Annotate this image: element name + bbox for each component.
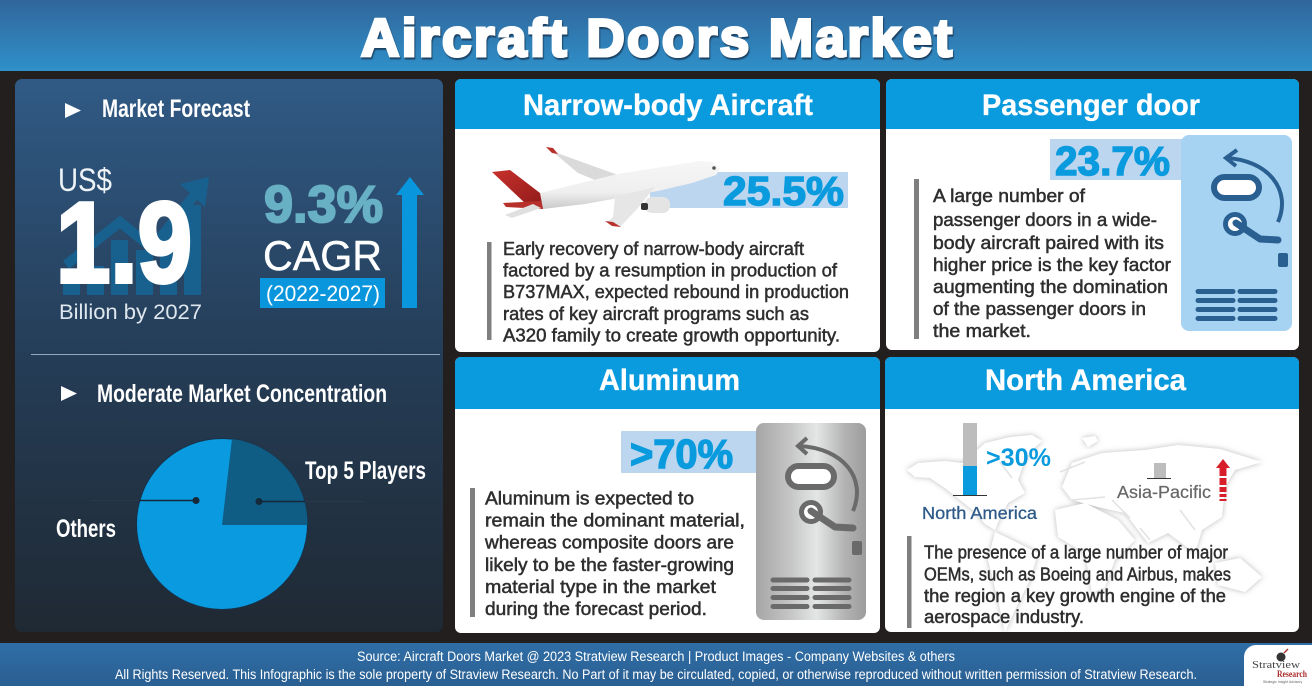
north america bar xyxy=(953,423,987,496)
text block: rates of key aircraft programs such as xyxy=(503,304,809,324)
percentage band xyxy=(621,431,759,473)
text block: passenger doors in a wide- xyxy=(933,210,1157,230)
label: asia-pacific: Asia-Pacific xyxy=(1117,482,1211,502)
logo: Strategic Insight Advisory xyxy=(1263,680,1303,684)
label: top 5 players: Top 5 Players xyxy=(305,457,426,485)
panel: north america xyxy=(885,357,1299,632)
title: Aircraft Doors Market xyxy=(361,9,952,68)
percentage: >30% xyxy=(986,444,1051,472)
icon: passenger door xyxy=(1181,135,1292,331)
text block: the region a key growth engine of the xyxy=(924,586,1226,606)
text block xyxy=(914,179,1171,341)
market value: US$ xyxy=(58,162,112,198)
header banner with title xyxy=(0,0,1312,71)
concentration heading: Moderate Market Concentration xyxy=(97,380,387,408)
text block: factored by a resumption in production of xyxy=(503,260,838,280)
text block: body aircraft paired with its xyxy=(933,233,1164,253)
text block: Aluminum is expected to xyxy=(485,488,694,508)
CAGR value: CAGR xyxy=(263,232,382,279)
text block: augmenting the domination xyxy=(933,277,1168,297)
text block: Early recovery of narrow-body aircraft xyxy=(503,239,804,259)
market forecast heading: Market Forecast xyxy=(102,95,251,123)
text block: remain the dominant material, xyxy=(485,510,745,530)
percentage band xyxy=(650,172,848,208)
logo: Stratview xyxy=(1252,660,1301,671)
source line: Source: Aircraft Doors Market @ 2023 Stratview Research | Product Images - Company Websites & others xyxy=(357,649,955,664)
icon: metal door xyxy=(756,423,866,620)
text block: of the passenger doors in xyxy=(933,299,1146,319)
panel: aluminum xyxy=(455,357,880,633)
percentage: 23.7% xyxy=(1055,138,1170,184)
CAGR value: (2022-2027) xyxy=(266,281,380,306)
percentage: 25.5% xyxy=(723,168,844,214)
CAGR value xyxy=(260,176,385,308)
label: north america: North America xyxy=(922,503,1037,523)
asia-pacific bar xyxy=(1147,463,1171,478)
pie chart xyxy=(90,438,365,610)
text block: The presence of a large number of major xyxy=(924,542,1228,562)
text block: whereas composite doors are xyxy=(484,532,734,552)
panel: narrow-body aircraft xyxy=(455,79,880,352)
market value: Billion by 2027 xyxy=(59,301,202,324)
text block xyxy=(487,239,849,346)
chart graphic behind value xyxy=(63,177,209,295)
logo xyxy=(1244,645,1312,686)
footer xyxy=(0,643,1312,686)
text block: during the forecast period. xyxy=(485,599,707,619)
text block: A large number of xyxy=(933,186,1086,206)
market value: 1.9 xyxy=(56,180,192,307)
CAGR value: 9.3% xyxy=(264,176,383,234)
text block xyxy=(470,488,745,619)
heading: North America xyxy=(985,364,1186,397)
heading: Aluminum xyxy=(599,364,740,397)
rights line: All Rights Reserved. This Infographic is the sole property of Straview Research. No Part of it may be circulated, copied, or otherwise reproduced without written permission of Stratview Research. xyxy=(115,667,1197,682)
market forecast heading xyxy=(65,95,251,123)
text block xyxy=(907,536,1231,628)
icon: up arrow xyxy=(396,177,424,308)
icon: aeroplane xyxy=(492,147,720,227)
heading: Narrow-body Aircraft xyxy=(523,89,813,122)
heading: Passenger door xyxy=(982,89,1200,122)
text block: aerospace industry. xyxy=(924,607,1084,627)
text block: the market. xyxy=(933,321,1031,341)
percentage band xyxy=(1050,139,1185,180)
panel: market forecast and concentration xyxy=(15,79,443,632)
logo: Research xyxy=(1277,669,1307,679)
icon: red growth arrow xyxy=(1216,459,1230,501)
percentage: >70% xyxy=(630,431,733,477)
text block: higher price is the key factor xyxy=(933,255,1171,275)
label: others: Others xyxy=(56,515,116,543)
text block: A320 family to create growth opportunity. xyxy=(503,326,840,346)
text block: material type in the market xyxy=(485,577,716,597)
panel: passenger door xyxy=(886,79,1299,350)
text block: B737MAX, expected rebound in production xyxy=(503,282,849,302)
text block: likely to be the faster-growing xyxy=(485,555,734,575)
text block: OEMs, such as Boeing and Airbus, makes xyxy=(924,564,1231,584)
world map xyxy=(907,435,1262,632)
